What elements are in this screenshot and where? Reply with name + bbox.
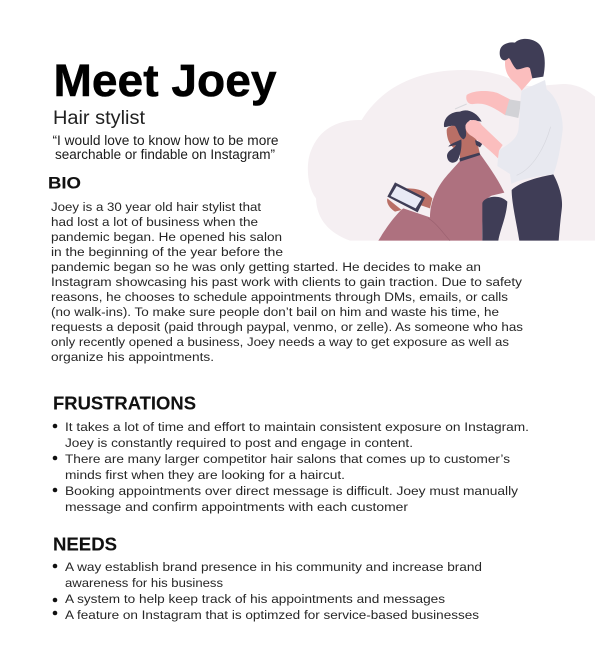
list: frustrations (53, 420, 529, 514)
heading: bio: BIO (48, 174, 81, 192)
list: frustrations: Booking appointments over direct message is difficult. Joey must manually (65, 484, 519, 498)
list: needs: awareness for his business (65, 576, 223, 590)
text block: bio: in the beginning of the year before the (51, 245, 283, 259)
text block: bio: reasons, he chooses to schedule appointments through DMs, emails, or calls (51, 290, 508, 304)
stylist's front arm (465, 120, 503, 158)
illustration: hair stylist cutting client's hair (308, 39, 595, 241)
text block: bio: pandemic began. He opened his salon (51, 230, 282, 244)
text block: bio: pandemic began so he was only getting started. He decides to make an (51, 260, 481, 274)
heading: frustrations: FRUSTRATIONS (53, 394, 196, 414)
title: Meet Joey (54, 55, 276, 106)
client with cape and tablet (378, 110, 507, 241)
list: needs: A way establish brand presence in his community and increase brand (65, 560, 482, 574)
quote (52, 133, 278, 162)
list: frustrations: message and confirm appointments with each customer (65, 500, 408, 514)
background blob (308, 70, 595, 241)
text block: bio: (no walk-ins). To make sure people don’t bail on him and waste his time, he (51, 305, 499, 319)
text block: bio: Joey is a 30 year old hair stylist that (51, 200, 262, 214)
text block: bio: had lost a lot of business when the (51, 215, 258, 229)
list: frustrations: minds first when they are looking for a haircut. (65, 468, 345, 482)
subtitle: Hair stylist (53, 108, 146, 129)
list: frustrations: There are many larger competitor hair salons that comes up to customer’s (65, 452, 510, 466)
list: needs: A system to help keep track of his appointments and messages (65, 592, 445, 606)
text block: bio: organize his appointments. (51, 350, 214, 364)
text block: bio: only recently opened a business, Joey needs a way to get exposure as well as (51, 335, 509, 349)
list: needs (53, 560, 482, 622)
quote: “I would love to know how to be more (52, 133, 278, 148)
list: frustrations: Joey is constantly required to post and engage in content. (65, 436, 413, 450)
stylist (455, 39, 563, 241)
text block: bio: Instagram showcasing his past work with clients to gain traction. Due to safety (51, 275, 523, 289)
list: frustrations: It takes a lot of time and effort to maintain consistent exposure on Instagram. (65, 420, 529, 434)
text block: bio: requests a deposit (paid through paypal, venmo, or zelle). As someone who has (51, 320, 523, 334)
quote: searchable or findable on Instagram” (55, 147, 275, 162)
heading: needs: NEEDS (53, 534, 117, 554)
text block: bio (51, 200, 523, 364)
list: needs: A feature on Instagram that is optimzed for service-based businesses (65, 608, 479, 622)
